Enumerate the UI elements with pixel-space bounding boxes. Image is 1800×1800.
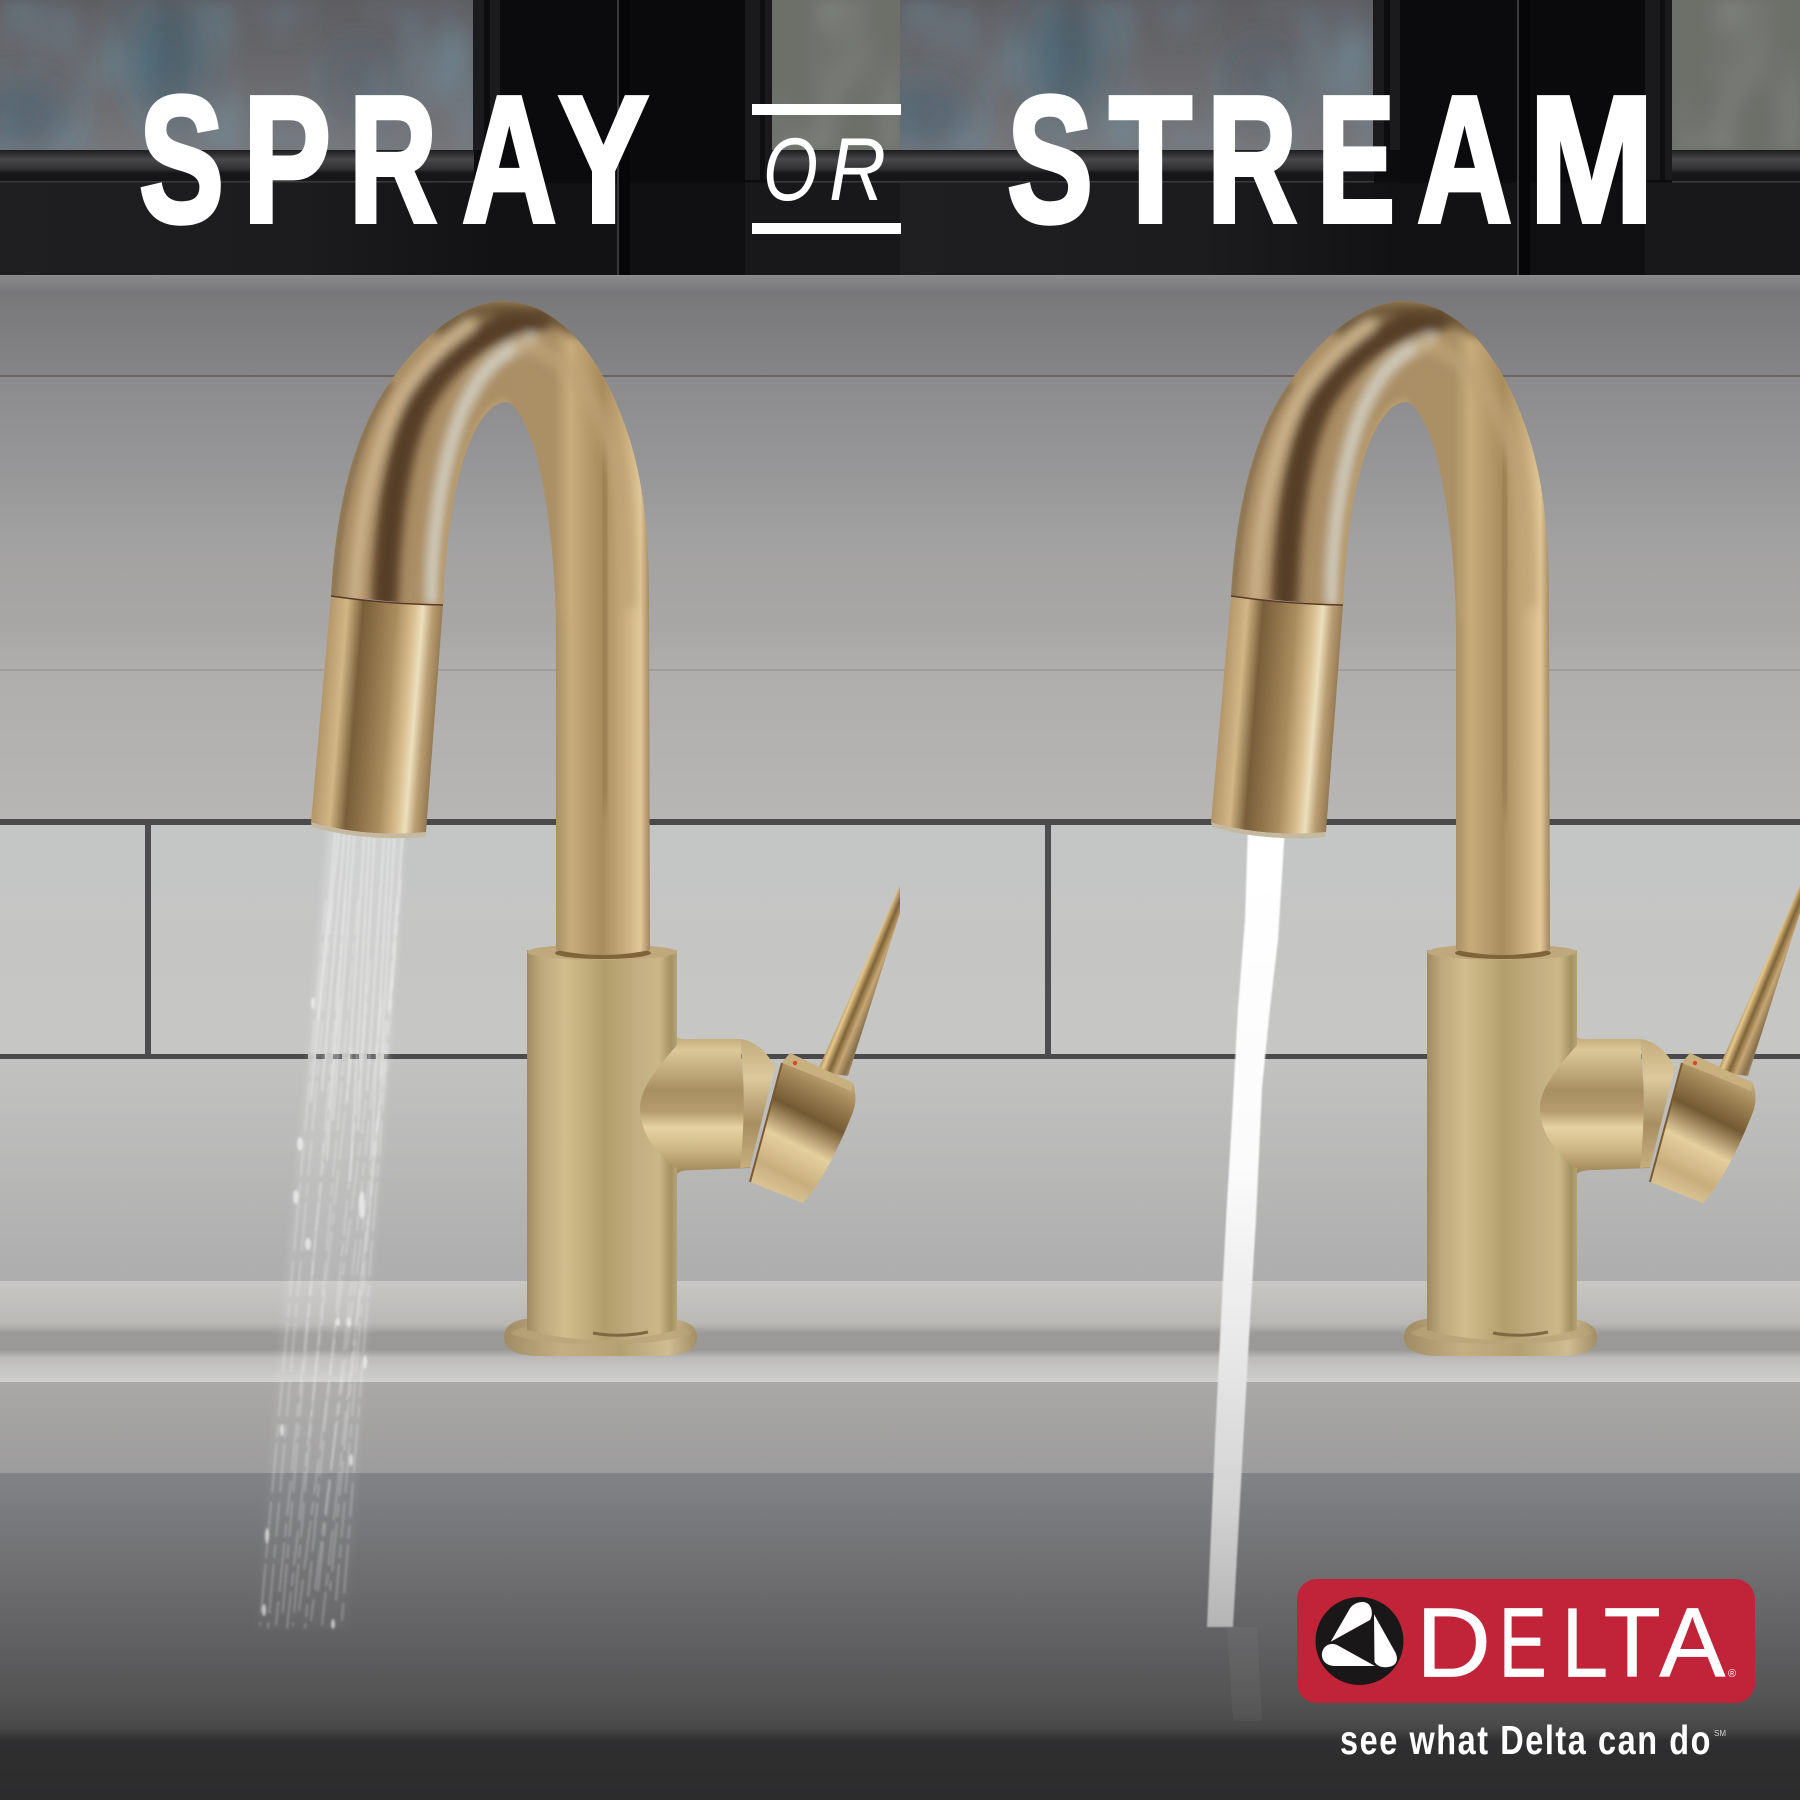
- spray water: [257, 826, 405, 1630]
- scene: window, tiled wall, countertop: [870, 0, 1800, 1800]
- title: [139, 60, 1654, 260]
- wordmark: DELTA: D: [1416, 1588, 1491, 1698]
- faucet: spout, handle, base: [311, 301, 900, 1356]
- badge: OR between two bars: R: [829, 119, 886, 219]
- logo: Delta: [1297, 1579, 1755, 1703]
- wordmark: DELTA: L: [1562, 1588, 1608, 1698]
- heading: STREAM: A: [1417, 60, 1512, 260]
- heading: SPRAY: P: [243, 60, 331, 260]
- heading: STREAM: R: [1207, 60, 1297, 260]
- heading: SPRAY: Y: [558, 60, 648, 260]
- logo badge background: [1297, 1579, 1755, 1703]
- badge: OR between two bars: [752, 104, 901, 234]
- heading: STREAM: E: [1317, 60, 1395, 260]
- panel: spray (left half of photo): [0, 0, 900, 1800]
- heading: SPRAY: A: [462, 60, 556, 260]
- service mark: SM: [1714, 1729, 1726, 1738]
- heading: STREAM: S: [1007, 60, 1093, 260]
- icon: Delta triangle mark: [1316, 1597, 1404, 1685]
- faucet: spout, handle, base: [1211, 301, 1800, 1356]
- scene: window, tiled wall, countertop: [0, 0, 900, 1800]
- panel: stream (right half of photo): [870, 0, 1800, 1800]
- wordmark: DELTA: E: [1499, 1588, 1547, 1698]
- heading: SPRAY: R: [349, 60, 437, 260]
- heading: STREAM: T: [1109, 60, 1192, 260]
- tagline: see what Delta can do: [1340, 1717, 1712, 1763]
- stream water: [1207, 826, 1285, 1721]
- heading: SPRAY: S: [139, 60, 224, 260]
- wordmark: DELTA: A: [1659, 1588, 1726, 1698]
- heading: STREAM: M: [1529, 60, 1654, 260]
- wordmark: DELTA: T: [1604, 1588, 1661, 1698]
- registered mark: ®: [1728, 1668, 1736, 1680]
- badge: OR between two bars: O: [763, 119, 818, 219]
